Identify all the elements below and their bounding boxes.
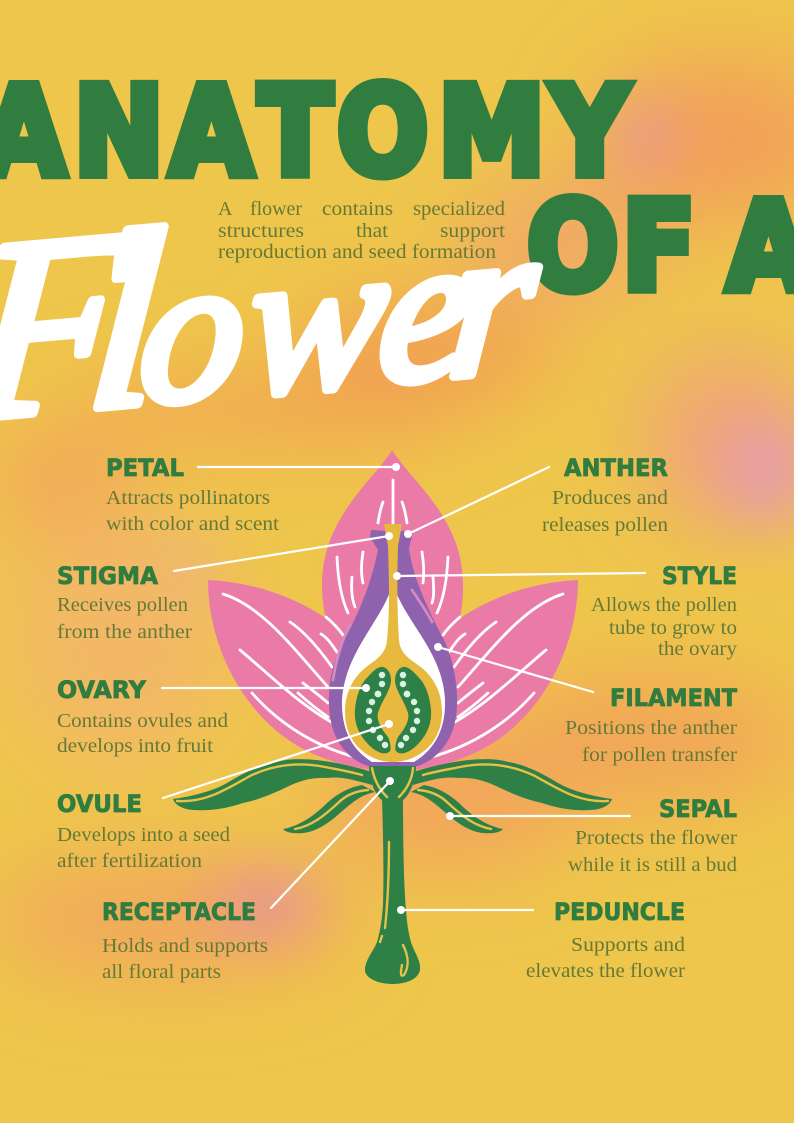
callout: style: tube to grow to <box>609 618 737 639</box>
style and stigma <box>345 524 442 762</box>
callout: peduncle: PEDUNCLE <box>554 898 685 926</box>
sepal and stem highlights <box>177 764 608 976</box>
receptacle and peduncle <box>365 766 420 984</box>
intro text: A <box>218 198 233 220</box>
flower illustration <box>173 450 612 984</box>
callout: sepal: while it is still a bud <box>568 855 737 876</box>
callout: filament: Positions the anther <box>565 718 738 739</box>
intro text: specialized <box>413 198 505 220</box>
callout: ovule <box>57 720 393 872</box>
callout: ovary: Contains ovules and <box>57 711 228 732</box>
white cavity <box>342 582 445 762</box>
right large sepal <box>413 759 612 810</box>
callout: receptacle <box>102 777 394 983</box>
callout: ovule: OVULE <box>57 790 142 818</box>
title: Flower script: o <box>133 210 255 449</box>
callout: ovule: Develops into a seed <box>57 825 230 846</box>
style leader line <box>397 573 645 576</box>
callout: filament: for pollen transfer <box>582 745 738 766</box>
intro text: that <box>356 220 388 242</box>
callout: anther: Produces and <box>552 488 668 509</box>
receptacle leader line <box>271 781 390 908</box>
title: ANATOMY: ANATOMY <box>0 61 630 204</box>
callout: sepal: SEPAL <box>659 795 737 823</box>
back petal veins <box>337 480 448 613</box>
callout: style: STYLE <box>662 562 737 590</box>
left petal <box>208 580 395 772</box>
title: Flower script: e <box>372 190 482 428</box>
title: Flower script: l <box>80 178 173 463</box>
callout: anther <box>404 454 668 538</box>
callout: peduncle <box>397 898 686 982</box>
ovary leader line <box>162 687 366 689</box>
intro text: reproduction and seed formation <box>218 241 496 263</box>
callout: petal: with color and scent <box>106 514 280 535</box>
callout: ovule: after fertilization <box>57 851 202 872</box>
intro text: support <box>440 220 505 242</box>
title: OF A: OF A <box>0 176 794 319</box>
sepal leader line <box>450 815 630 817</box>
callout: anther: ANTHER <box>564 454 668 482</box>
intro text: contains <box>322 198 393 220</box>
callout: stigma: STIGMA <box>57 562 158 590</box>
right petal <box>391 580 578 772</box>
petal leader line <box>198 466 396 468</box>
callout: peduncle: Supports and <box>571 935 685 956</box>
side petal veins <box>223 594 563 760</box>
left lower sepal <box>283 785 375 833</box>
ovary: left ovule chamber <box>355 667 391 753</box>
filament highlights <box>333 590 432 680</box>
right lower sepal <box>411 785 503 833</box>
callout: stigma: from the anther <box>57 622 193 643</box>
left large sepal <box>173 759 372 810</box>
callout: ovary: develops into fruit <box>57 736 214 757</box>
title: Flower script: w <box>240 198 396 439</box>
filament leader line <box>438 647 593 692</box>
callout: filament <box>434 643 738 766</box>
intro text: structures <box>218 220 304 242</box>
stigma leader line <box>174 536 389 571</box>
peduncle leader line <box>401 909 533 911</box>
callout: receptacle: all floral parts <box>102 962 221 983</box>
callout: style: the ovary <box>658 639 737 660</box>
callout: ovary: OVARY <box>57 676 147 704</box>
callout: peduncle: elevates the flower <box>526 961 686 982</box>
intro text: flower <box>250 198 302 220</box>
title: Flower script: r <box>441 176 546 424</box>
callout: style <box>393 562 737 660</box>
callout: anther: releases pollen <box>542 515 668 536</box>
callout: style: Allows the pollen <box>591 595 737 616</box>
callout: petal <box>106 454 400 535</box>
sepals and peduncle <box>173 759 612 984</box>
callout: ovary <box>57 676 370 757</box>
callout: sepal <box>446 795 738 876</box>
back petal <box>322 450 463 720</box>
ovary: right ovule chamber <box>395 667 431 753</box>
anther leader line <box>408 467 549 534</box>
callout: sepal: Protects the flower <box>575 828 738 849</box>
callout: petal: PETAL <box>106 454 184 482</box>
callout: receptacle: RECEPTACLE <box>102 898 256 926</box>
callout: stigma <box>57 532 393 643</box>
callout: receptacle: Holds and supports <box>102 936 268 957</box>
stamens: anther and filament <box>329 530 457 766</box>
callout: filament: FILAMENT <box>610 684 738 712</box>
intro text <box>218 198 505 263</box>
ovules dots <box>366 672 420 748</box>
callout: stigma: Receives pollen <box>57 595 188 616</box>
callout: petal: Attracts pollinators <box>106 488 270 509</box>
ovule leader line <box>163 724 389 798</box>
